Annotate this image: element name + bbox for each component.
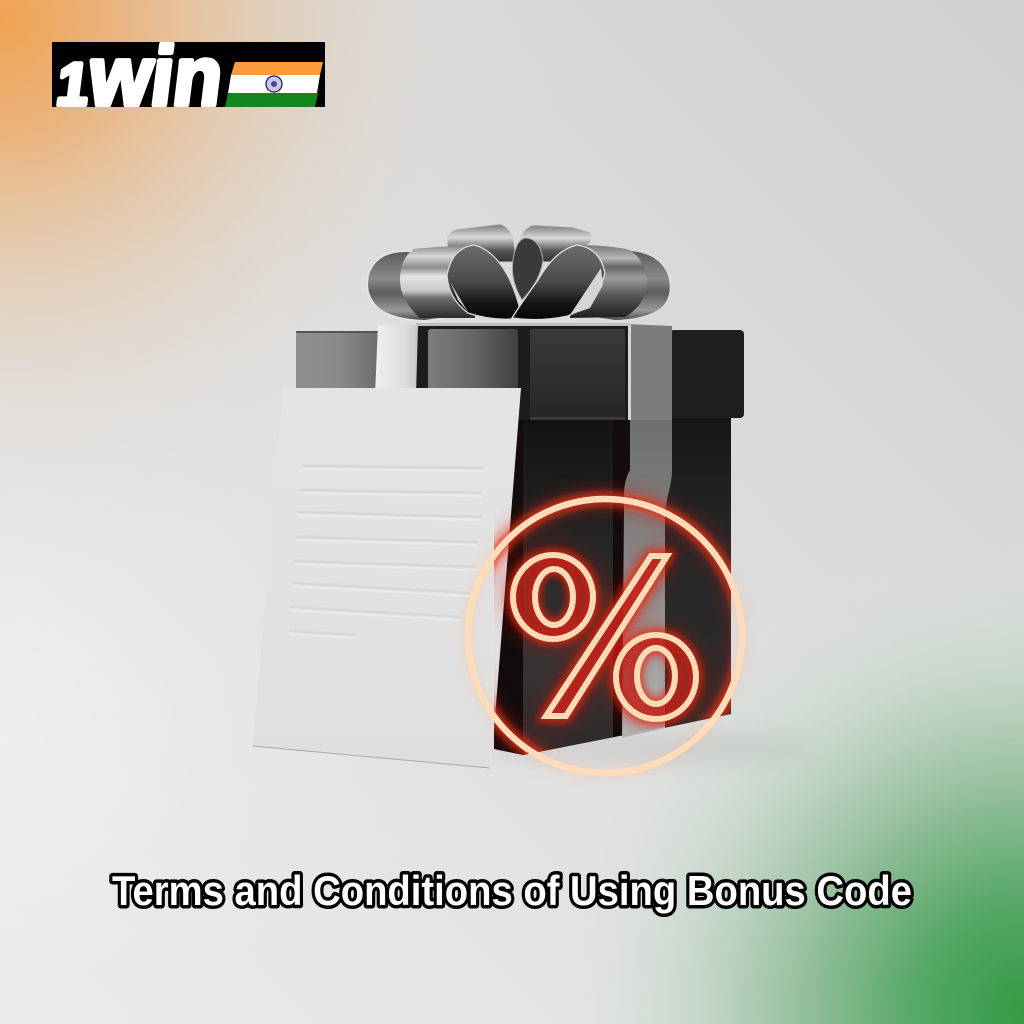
bow left petal	[447, 245, 522, 319]
flag of India	[225, 62, 323, 107]
gift box	[296, 224, 810, 760]
bow right band	[570, 245, 647, 318]
document lines	[289, 466, 484, 638]
paper document	[253, 388, 521, 768]
neon glow on box	[494, 480, 731, 755]
top edge highlight	[416, 323, 630, 326]
box lid	[296, 326, 744, 420]
paper bottom edge	[253, 746, 490, 768]
logo wordmark: 1win	[53, 29, 228, 123]
petal highlight	[570, 268, 603, 315]
faint outer glow	[468, 499, 742, 773]
lid ribbon left	[375, 325, 418, 395]
title: Terms and Conditions of Using Bonus Code	[112, 867, 912, 914]
floor shadow	[470, 736, 810, 760]
bow right petal	[512, 245, 605, 320]
vertical ribbon on body	[622, 416, 672, 738]
outer circle	[468, 499, 742, 773]
percent sign	[513, 555, 696, 719]
percent interior tint	[513, 555, 696, 719]
logo: 1win with flag	[52, 42, 325, 107]
wide red glow	[494, 480, 731, 755]
petal highlight left	[450, 282, 468, 312]
tight red glow	[494, 488, 731, 755]
bow right outer loop	[595, 250, 671, 321]
bow back left loop	[447, 224, 516, 262]
bow center petals	[512, 238, 543, 300]
bow left outer loop	[367, 251, 445, 321]
bow	[367, 224, 671, 321]
box body	[494, 415, 731, 755]
lid ribbon right	[628, 324, 672, 420]
neon percent badge	[468, 499, 742, 773]
bow back right loop	[520, 225, 591, 262]
bow left band	[400, 246, 475, 318]
